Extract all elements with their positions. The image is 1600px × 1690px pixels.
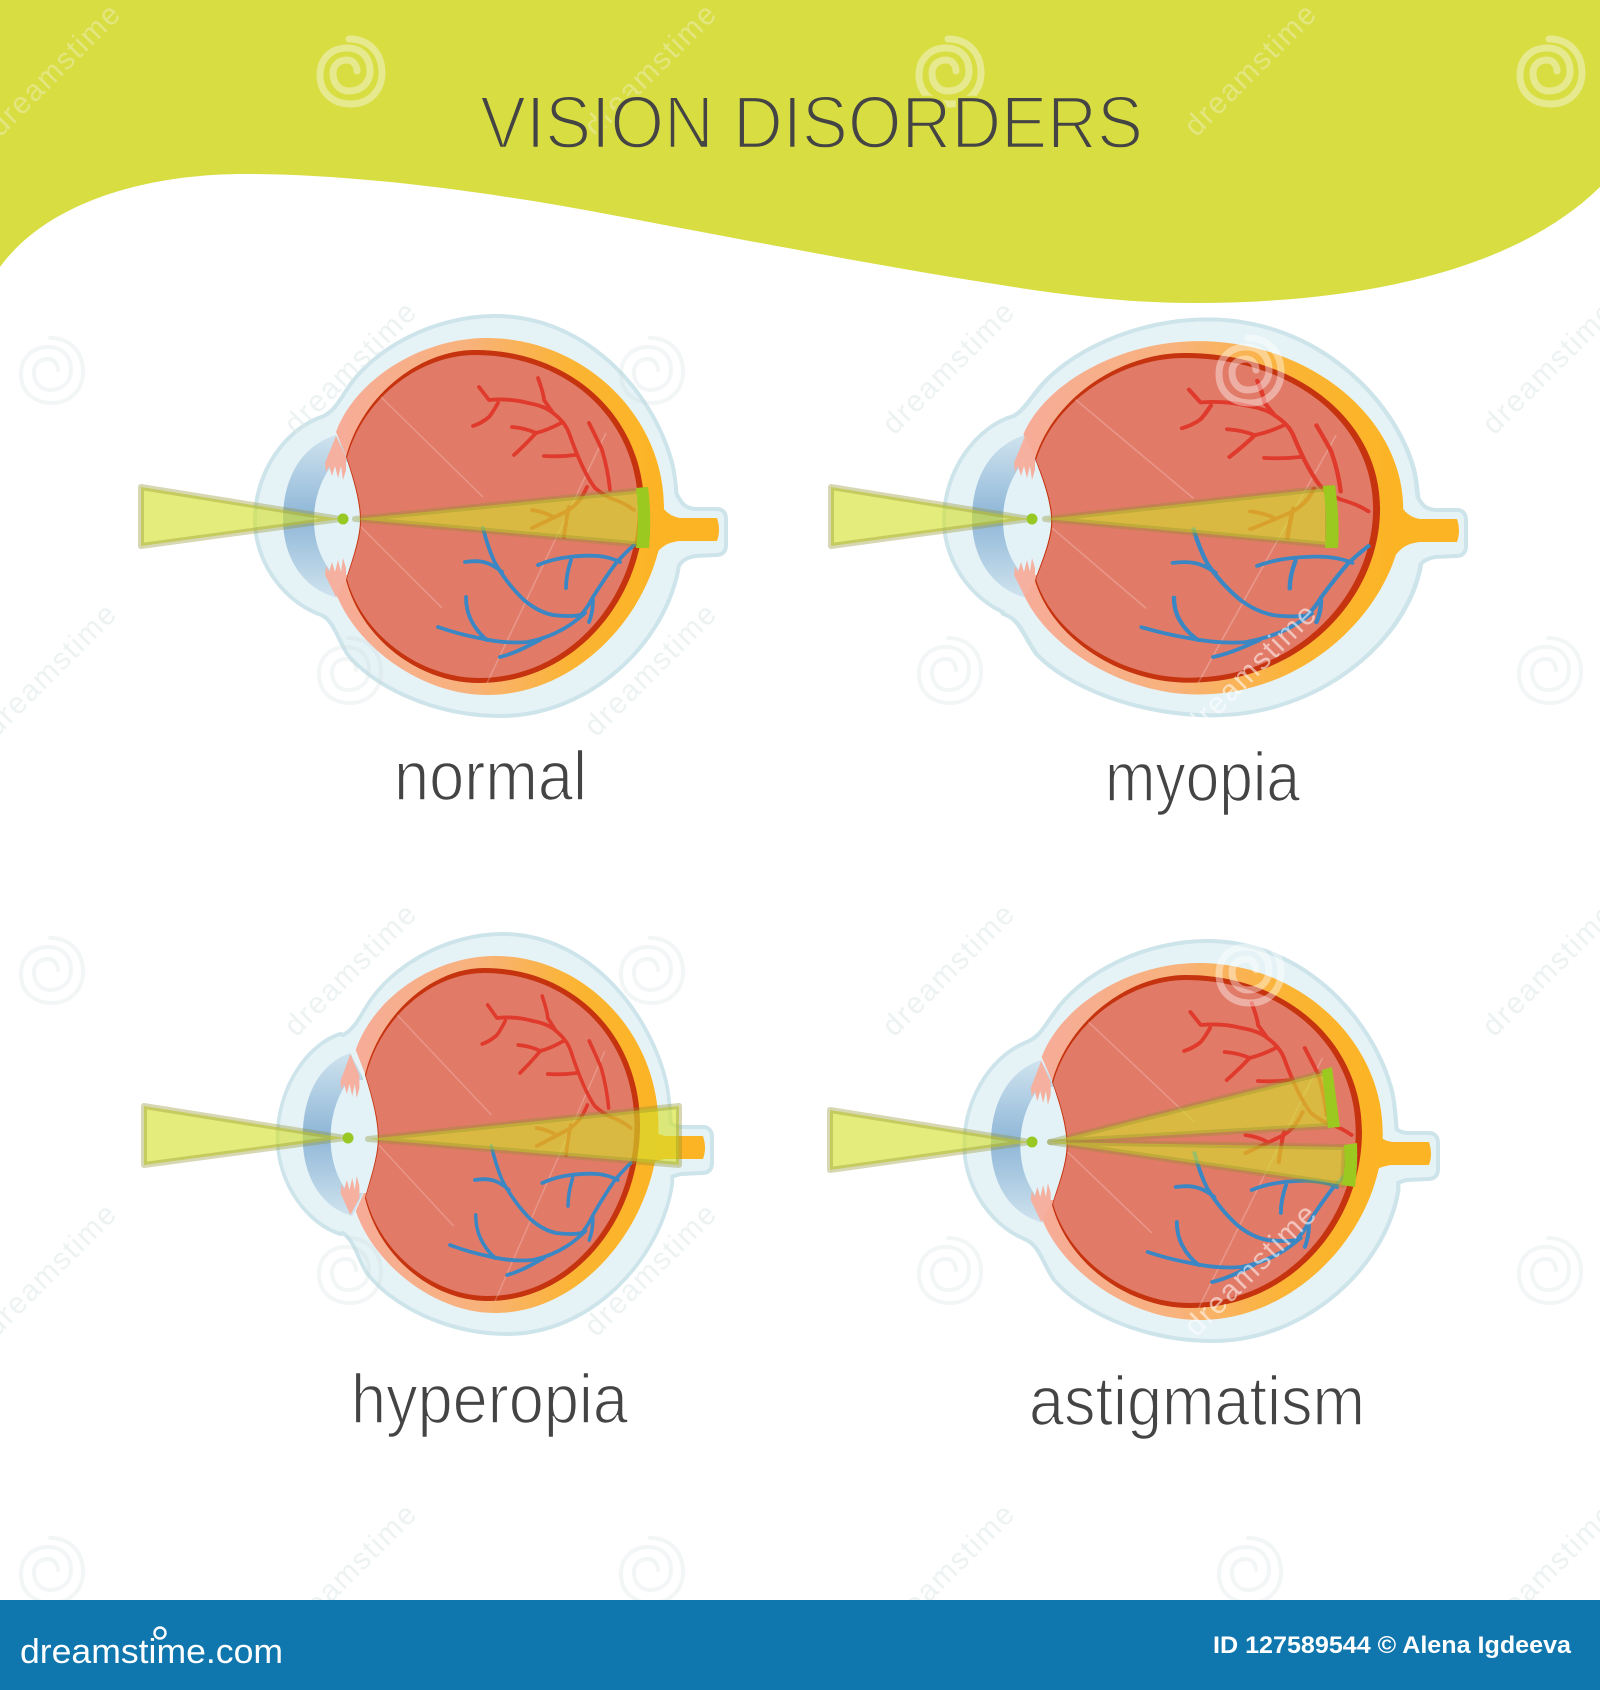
- faint watermark text: dreamstime: [578, 598, 723, 743]
- panel: myopia eye: [831, 321, 1464, 713]
- faint watermark text: dreamstime: [278, 296, 423, 441]
- light beams: astigmatism: [830, 1067, 1357, 1187]
- light beam: myopia: [831, 485, 1339, 548]
- label: normal: normal: [394, 737, 587, 815]
- header watermarks: dreamstime: [1178, 0, 1323, 143]
- strong watermark spirals over eyes: [1219, 338, 1281, 1003]
- strong watermark text over eyes: [1178, 598, 1323, 1343]
- strong watermark text over eyes: dreamstime: [1178, 598, 1323, 743]
- label: hyperopia: hyperopia: [351, 1360, 628, 1438]
- header watermarks: [0, 0, 1582, 143]
- footer logo text: dreamstime.com: [20, 1633, 283, 1671]
- title: VISION DISORDERS: [480, 81, 1143, 164]
- light beam: normal: [141, 487, 650, 548]
- footer bar: [0, 1600, 1600, 1690]
- header wave banner: [0, 0, 1600, 303]
- footer logo spiral: [154, 1628, 166, 1638]
- faint watermark text: dreamstime: [876, 296, 1021, 441]
- label: astigmatism: astigmatism: [1029, 1362, 1365, 1440]
- faint watermark text: dreamstime: [578, 1198, 723, 1343]
- footer credit: ID 127589544 © Alena Igdeeva: [1213, 1632, 1572, 1659]
- header watermarks: dreamstime: [578, 0, 723, 143]
- faint watermark text: dreamstime: [278, 1498, 423, 1643]
- label: myopia: myopia: [1105, 738, 1300, 816]
- faint watermark text: dreamstime: [876, 898, 1021, 1043]
- faint watermark text: dreamstime: [278, 898, 423, 1043]
- panel: astigmatism eye: [830, 943, 1436, 1339]
- faint watermark text: [0, 296, 1600, 1643]
- panel: normal eye: [141, 318, 724, 714]
- faint watermark text: dreamstime: [876, 1498, 1021, 1643]
- light beam: hyperopia: [144, 1106, 679, 1165]
- strong watermark text over eyes: dreamstime: [1178, 1198, 1323, 1343]
- watermark spirals: [21, 338, 1581, 1603]
- panel: hyperopia eye: [144, 936, 710, 1332]
